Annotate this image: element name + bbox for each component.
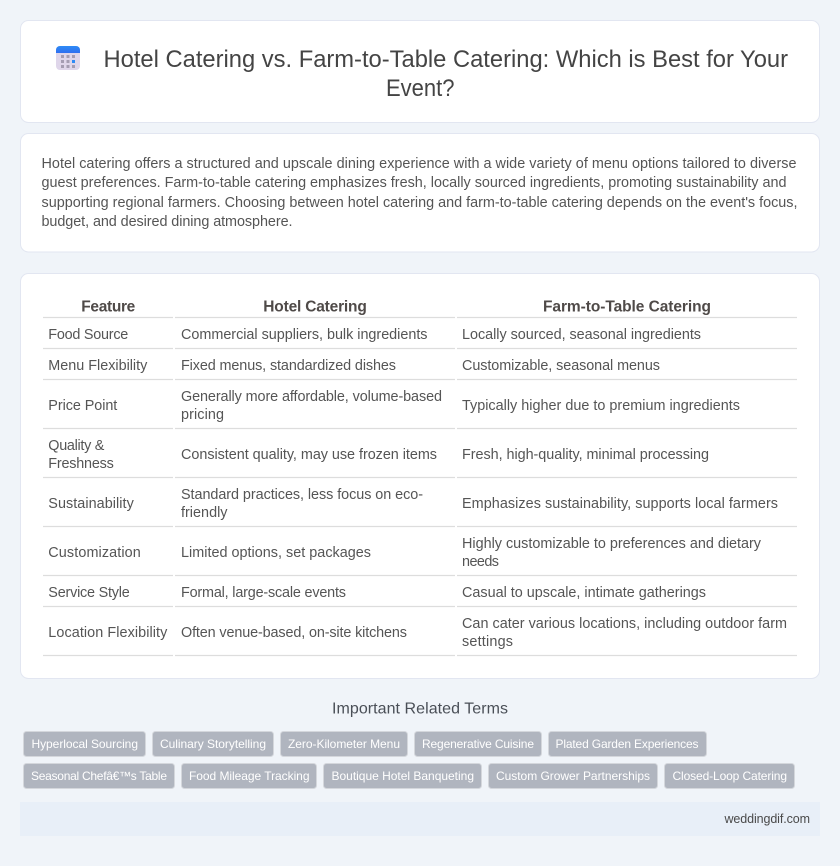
title heading: [104, 46, 788, 102]
row: sustainability: Sustainability: [48, 496, 135, 512]
row: menu flexibility: Fixed menus, standardized dishes: [181, 358, 396, 374]
tag: hyperlocal sourcing: [24, 732, 146, 756]
table header: Hotel Catering: [263, 298, 367, 316]
tag: boutique hotel banqueting: Boutique Hotel Banqueting: [332, 769, 474, 783]
tag: seasonal chef's table: [24, 764, 174, 788]
row: quality and freshness: Freshness: [48, 456, 114, 472]
tag: closed-loop catering: [664, 764, 794, 788]
row: quality and freshness: Consistent quality, may use frozen items: [181, 447, 437, 463]
intro text panel: [20, 134, 820, 252]
row: service style: Casual to upscale, intimate gatherings: [462, 585, 706, 601]
tag: zero-kilometer menu: Zero-Kilometer Menu: [288, 737, 400, 751]
row: food source: Commercial suppliers, bulk ingredients: [181, 327, 428, 343]
row: menu flexibility: [48, 358, 660, 374]
row: sustainability: [48, 487, 778, 521]
row: location flexibility: Often venue-based, on-site kitchens: [181, 625, 407, 641]
table header: [81, 298, 711, 316]
row: service style: Formal, large-scale events: [181, 585, 346, 601]
title heading: Hotel Catering vs. Farm-to-Table Catering: Which is Best for Your: [104, 46, 788, 73]
tag: closed-loop catering: Closed-Loop Catering: [672, 769, 787, 783]
tag: regenerative cuisine: Regenerative Cuisine: [422, 737, 534, 751]
tag: food mileage tracking: Food Mileage Tracking: [189, 769, 310, 783]
tag: plated garden experiences: Plated Garden Experiences: [556, 737, 698, 751]
comparison table panel: [20, 274, 820, 678]
footer source text: weddingdif.com: [724, 812, 810, 826]
row: quality and freshness: Quality &: [48, 438, 105, 454]
row: service style: Service Style: [48, 585, 130, 601]
row: sustainability: friendly: [181, 505, 228, 521]
row: location flexibility: Location Flexibility: [48, 625, 168, 641]
table row lines: [43, 318, 797, 656]
row: menu flexibility: Customizable, seasonal menus: [462, 358, 660, 374]
tag: zero-kilometer menu: [280, 732, 408, 756]
row: price point: Generally more affordable, volume-based: [181, 389, 442, 405]
intro paragraph: supporting regional farmers. Choosing between hotel catering and farm-to-table catering depends on the event's focus,: [42, 195, 798, 211]
intro paragraph: Hotel catering offers a structured and upscale dining experience with a wide variety of menu options tailored to diverse: [42, 156, 796, 172]
table header: Feature: [81, 298, 136, 316]
row: customization: Highly customizable to preferences and dietary: [462, 536, 762, 552]
row: customization: [48, 536, 762, 570]
row: location flexibility: settings: [462, 634, 513, 650]
row: sustainability: Standard practices, less focus on eco-: [181, 487, 423, 503]
row: location flexibility: Can cater various locations, including outdoor farm: [462, 616, 787, 632]
tag: culinary storytelling: [152, 732, 274, 756]
related terms heading: Important Related Terms: [332, 700, 508, 718]
title panel: [20, 20, 820, 122]
row: service style: [48, 585, 706, 601]
row: food source: Locally sourced, seasonal ingredients: [462, 327, 701, 343]
row: customization: needs: [462, 554, 499, 570]
row: sustainability: Emphasizes sustainability, supports local farmers: [462, 496, 778, 512]
tag: regenerative cuisine: [414, 732, 542, 756]
table header: Farm-to-Table Catering: [543, 298, 711, 316]
row: price point: [48, 389, 740, 423]
tag: culinary storytelling: Culinary Storytelling: [160, 737, 266, 751]
row: menu flexibility: Menu Flexibility: [48, 358, 148, 374]
row: price point: Price Point: [48, 398, 117, 414]
intro paragraph: guest preferences. Farm-to-table catering emphasizes fresh, locally sourced ingredients, promoting sustainability and: [42, 175, 786, 191]
footer: [20, 802, 820, 836]
tag: custom grower partnerships: Custom Grower Partnerships: [496, 769, 650, 783]
tag: boutique hotel banqueting: [324, 764, 482, 788]
row: customization: Limited options, set packages: [181, 545, 371, 561]
tag: custom grower partnerships: [488, 764, 658, 788]
tag: plated garden experiences: [548, 732, 706, 756]
tag: seasonal chef's table: Seasonal Chefâ€™s Table: [31, 769, 167, 783]
row: food source: [48, 327, 701, 343]
row: food source: Food Source: [48, 327, 128, 343]
row: quality and freshness: [48, 438, 709, 472]
icon: calendar: [56, 46, 80, 70]
row: price point: pricing: [181, 407, 224, 423]
row: quality and freshness: Fresh, high-quality, minimal processing: [462, 447, 709, 463]
tag: food mileage tracking: [182, 764, 316, 788]
row: price point: Typically higher due to premium ingredients: [462, 398, 740, 414]
intro paragraph: [42, 156, 798, 230]
row: customization: Customization: [48, 545, 141, 561]
row: location flexibility: [48, 616, 787, 650]
related terms tags: [24, 732, 794, 788]
title heading: Event?: [386, 75, 454, 102]
intro paragraph: budget, and desired dining atmosphere.: [42, 214, 292, 230]
tag: hyperlocal sourcing: Hyperlocal Sourcing: [32, 737, 138, 751]
